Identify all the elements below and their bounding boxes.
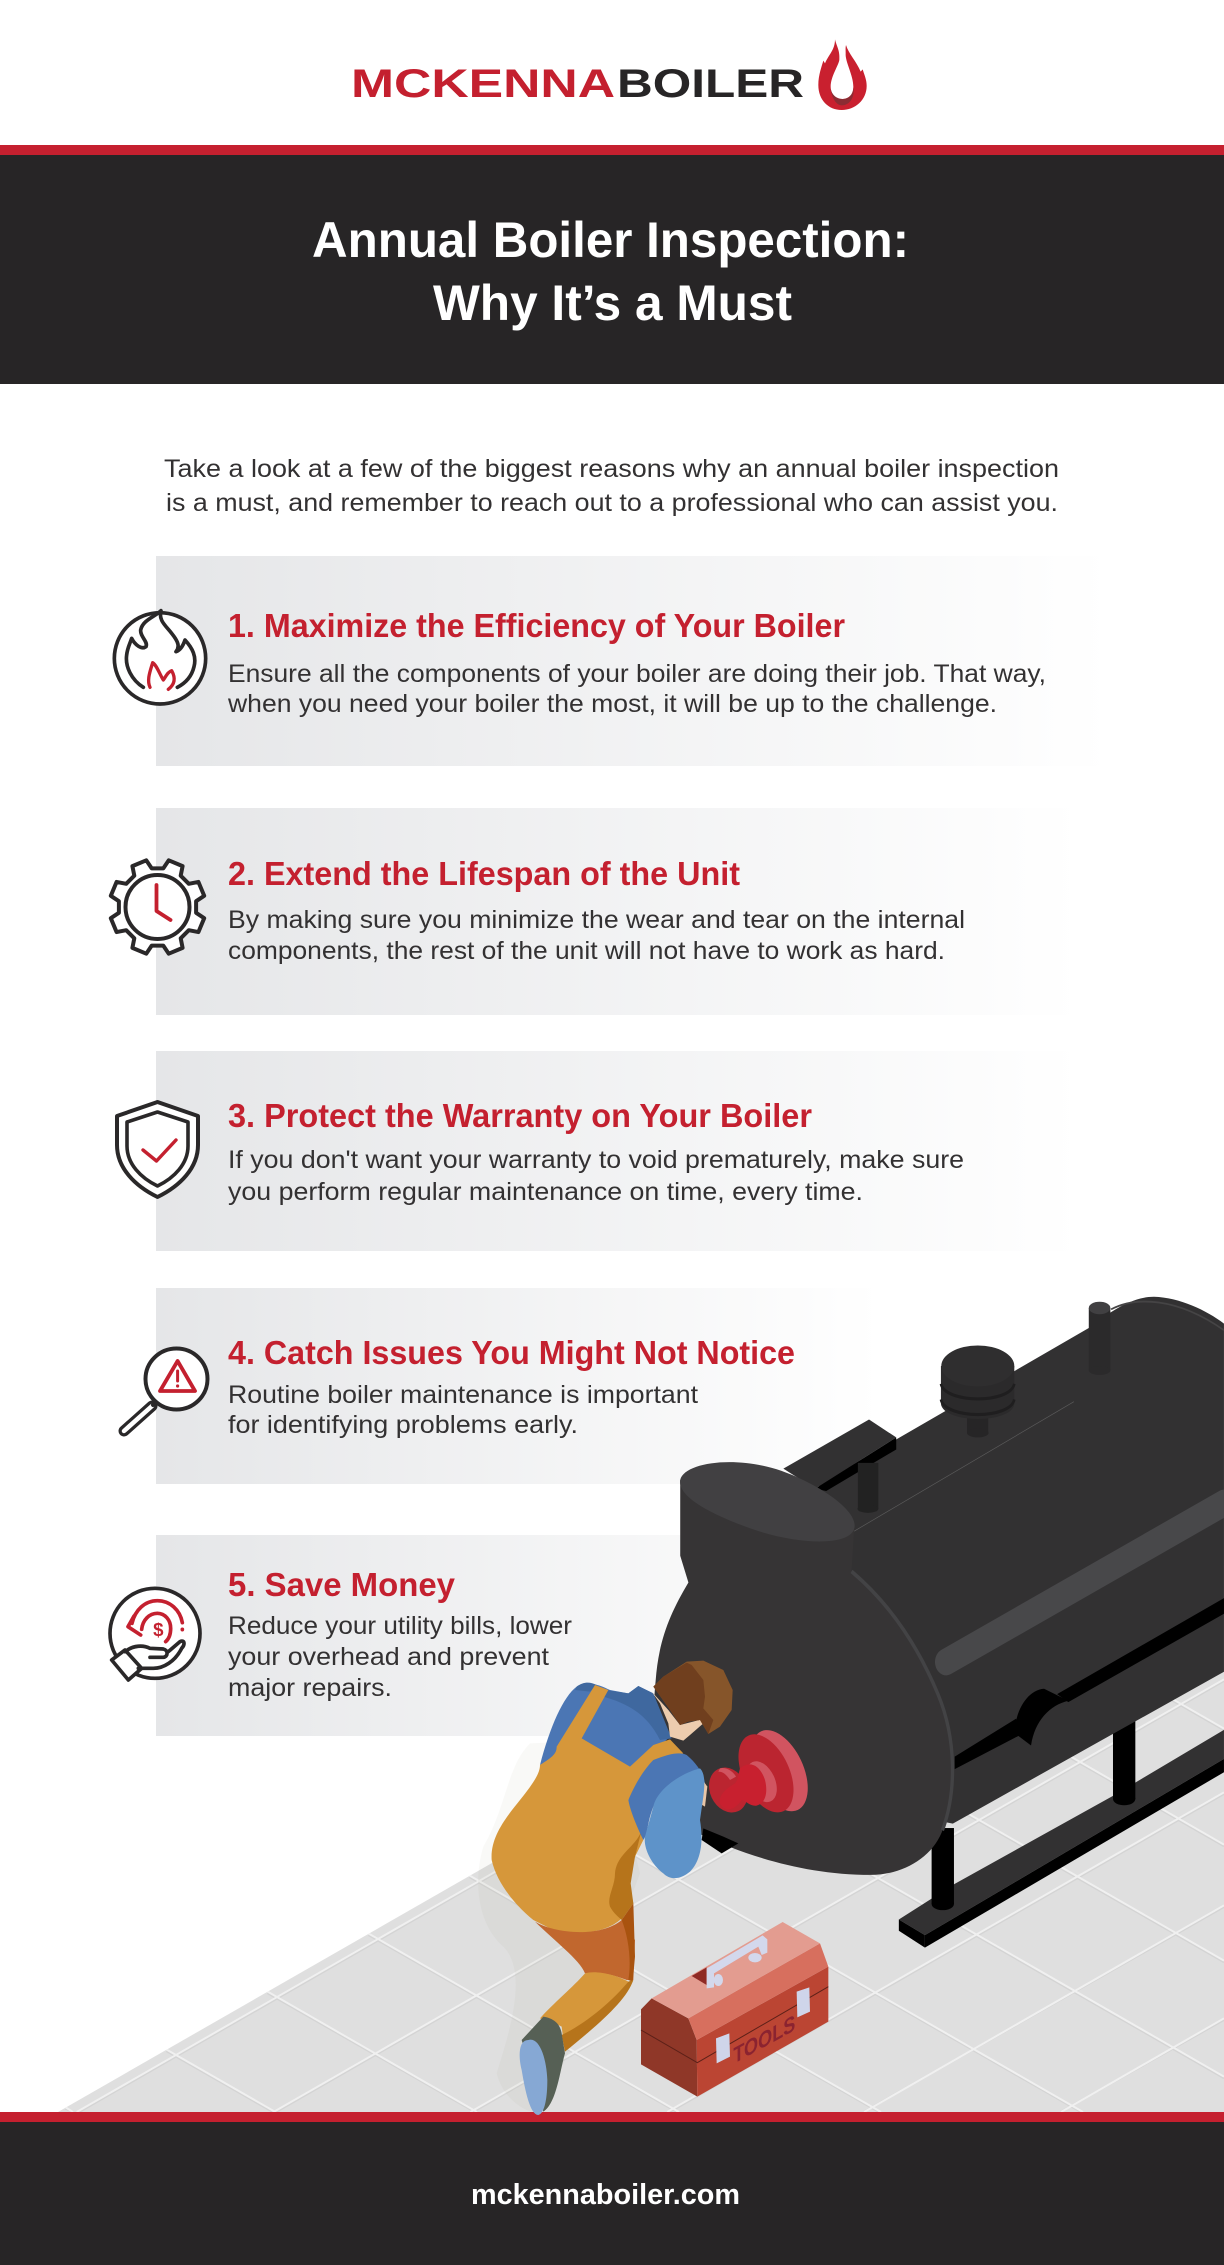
hairline <box>854 1402 1074 1531</box>
body text: Routine boiler maintenance is important <box>228 1381 698 1409</box>
heading: 4. Catch Issues You Might Not Notice <box>228 1334 795 1371</box>
heading: 5. Save Money <box>228 1566 456 1603</box>
body text: when you need your boiler the most, it will be up to the challenge. <box>227 690 997 718</box>
panel background <box>156 556 1110 766</box>
face <box>652 1692 703 1741</box>
illustration: boiler <box>654 1297 1224 1948</box>
latches <box>716 1987 810 2063</box>
shirt collar shade <box>575 1683 672 1740</box>
logo wordmark: MCKENNA <box>351 62 615 106</box>
upper arm <box>628 1753 705 1840</box>
icon: hand with money <box>110 1588 200 1680</box>
panel: reason 1 <box>114 556 1110 766</box>
body text <box>227 660 1046 718</box>
panel: reason 2 <box>111 808 1080 1015</box>
panel: reason 5 <box>110 1535 880 1736</box>
floor <box>58 1672 1224 2112</box>
panel: reason 4 <box>124 1288 880 1484</box>
shirt <box>540 1683 670 1773</box>
panel background <box>156 1535 880 1736</box>
panel: reason 3 <box>117 1051 1080 1251</box>
intro text: Take a look at a few of the biggest reasons why an annual boiler inspection <box>164 455 1059 483</box>
overalls <box>492 1685 683 1933</box>
icon: hand with money: $ <box>153 1619 164 1640</box>
lower leg <box>540 1972 628 2052</box>
thigh shade <box>622 1903 635 1982</box>
hair shade <box>653 1663 713 1734</box>
seam <box>641 1987 828 2063</box>
rear rail <box>783 1420 896 1513</box>
heading: 1. Maximize the Efficiency of Your Boiler <box>228 607 845 644</box>
top seam <box>1111 1302 1224 1330</box>
red stripe <box>0 145 1224 155</box>
intro text <box>164 455 1059 517</box>
toolbox <box>641 1922 828 2097</box>
intro text: is a must, and remember to reach out to a professional who can assist you. <box>166 489 1058 517</box>
panel background <box>156 808 1080 1015</box>
base rail and legs <box>899 1716 1224 1948</box>
hair <box>653 1661 733 1734</box>
body text: your overhead and prevent <box>228 1643 549 1671</box>
top valve <box>941 1345 1014 1437</box>
lid slope <box>688 1943 828 2040</box>
body text <box>228 1146 964 1206</box>
body text: you perform regular maintenance on time, every time. <box>228 1178 863 1206</box>
body text: components, the rest of the unit will not have to work as hard. <box>228 937 945 965</box>
shoe sole <box>520 2040 547 2115</box>
highlight bar <box>946 1503 1224 1662</box>
dark band <box>0 2122 1224 2265</box>
header band <box>0 145 1224 384</box>
front rail foot <box>702 1828 738 1853</box>
hand <box>699 1780 707 1807</box>
illustration: worker and toolbox <box>478 1661 828 2115</box>
worker shadow <box>478 1740 640 2113</box>
icon: shield <box>117 1102 198 1197</box>
panel background <box>156 1051 1080 1251</box>
body text: for identifying problems early. <box>228 1411 578 1439</box>
red stripe <box>0 2112 1224 2122</box>
handle <box>707 1935 767 1988</box>
title: Why It’s a Must <box>433 275 792 331</box>
vent pipe <box>1089 1302 1110 1375</box>
icon: gear clock <box>111 860 204 954</box>
icon: flame <box>114 611 206 704</box>
heading: 3. Protect the Warranty on Your Boiler <box>228 1097 812 1134</box>
icon: magnifier warning <box>124 1348 208 1431</box>
cap seam <box>852 1571 953 1830</box>
end cap and stack <box>654 1480 952 1875</box>
shoe <box>522 2017 565 2112</box>
title: Annual Boiler Inspection: <box>312 212 909 268</box>
toolbox front <box>697 1967 828 2097</box>
logo <box>351 39 867 110</box>
handle pegs <box>714 1953 762 1986</box>
website: mckennaboiler.com <box>471 2179 740 2211</box>
stack top <box>680 1462 855 1541</box>
footer band <box>0 2112 1224 2265</box>
thigh <box>535 1920 635 1980</box>
body text <box>228 1612 572 1702</box>
body text: By making sure you minimize the wear and tear on the internal <box>228 906 965 934</box>
black stripe with bracket <box>955 1598 1224 1769</box>
boiler body <box>819 1297 1224 1824</box>
body text: If you don't want your warranty to void prematurely, make sure <box>228 1146 964 1174</box>
panel background <box>156 1288 880 1484</box>
body text: major repairs. <box>228 1674 392 1702</box>
logo wordmark: BOILER <box>617 62 804 106</box>
handle base <box>692 1967 707 1985</box>
burner <box>702 1721 819 1821</box>
title <box>312 212 909 331</box>
worker <box>492 1661 733 2115</box>
body text: Reduce your utility bills, lower <box>228 1612 572 1640</box>
forearm <box>645 1768 704 1878</box>
body text <box>228 1381 698 1439</box>
overalls shade <box>609 1830 642 1920</box>
lid top <box>652 1922 820 2018</box>
body text <box>228 906 965 965</box>
icon: logo flame <box>818 39 867 110</box>
tools label: TOOLS <box>733 2010 795 2070</box>
body text: Ensure all the components of your boiler are doing their job. That way, <box>228 660 1046 688</box>
lower leg shade <box>562 1980 633 2052</box>
toolbox end <box>641 1998 697 2097</box>
heading: 2. Extend the Lifespan of the Unit <box>228 855 740 892</box>
dark band <box>0 155 1224 384</box>
